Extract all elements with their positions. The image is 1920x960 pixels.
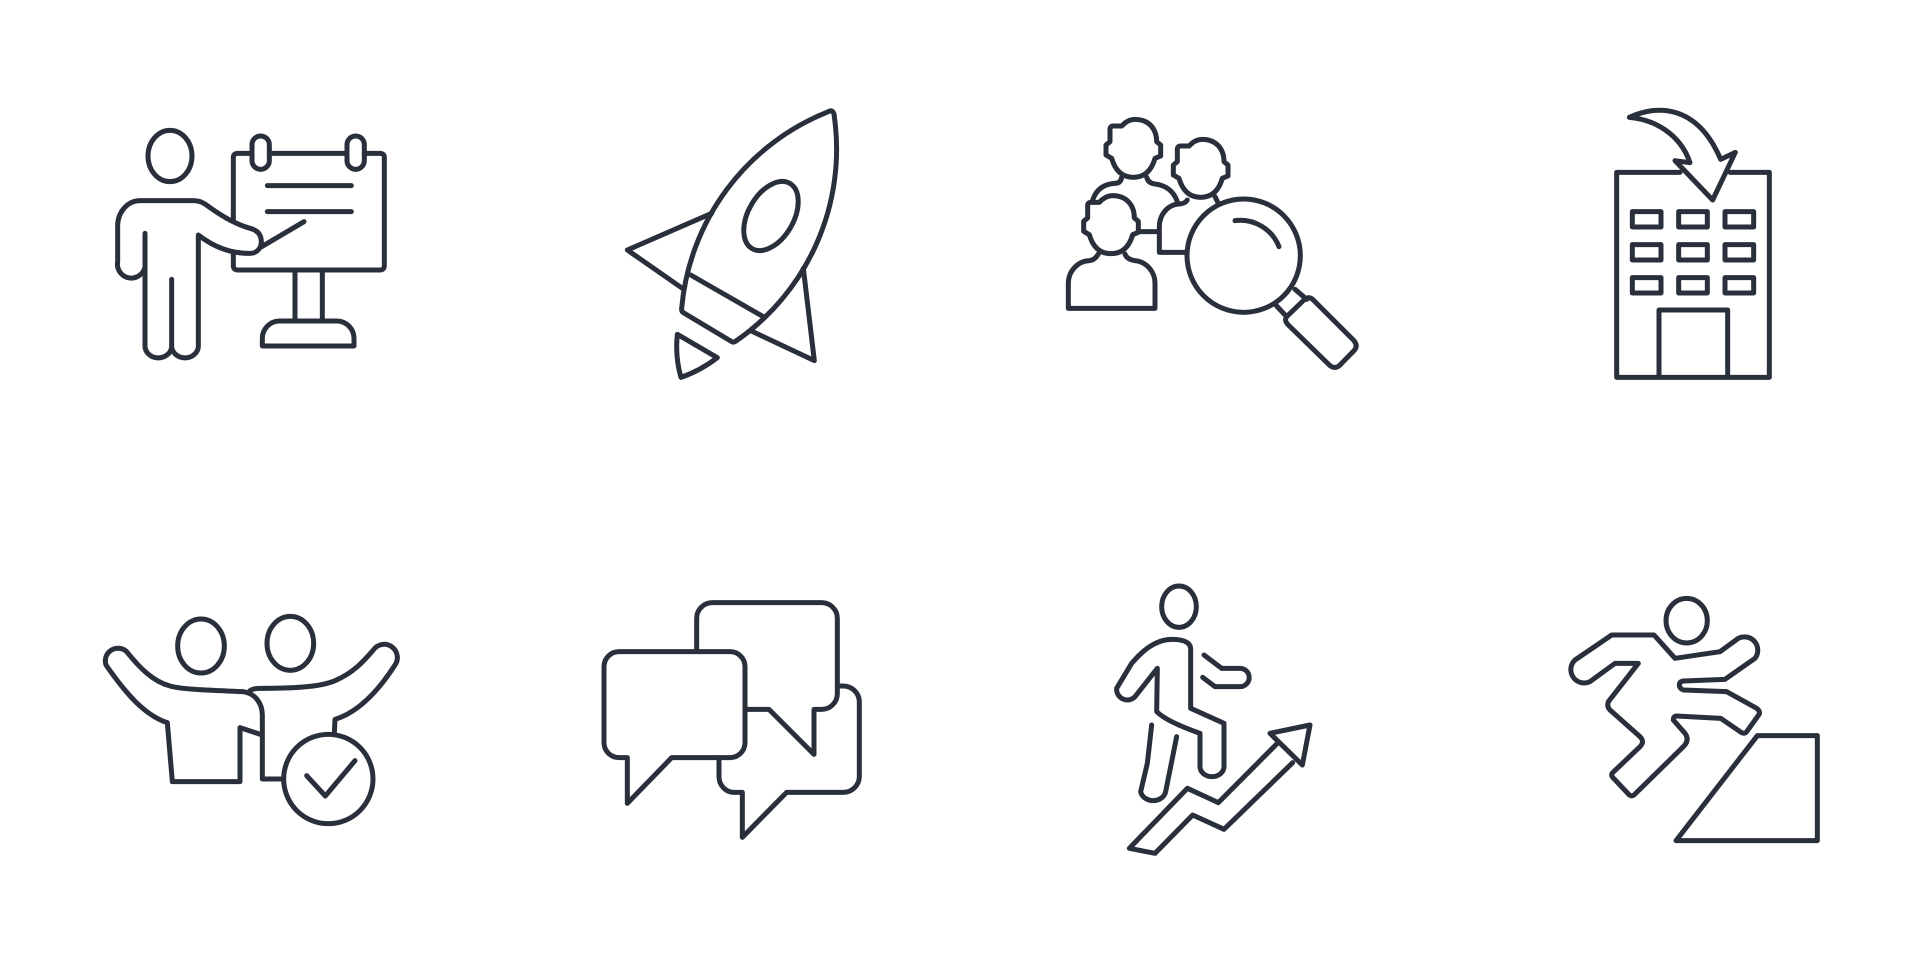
climber arm: [1203, 655, 1249, 687]
icon: speech bubbles: [604, 603, 859, 837]
rocket fins: [627, 213, 814, 361]
rising arrow: [1129, 725, 1310, 853]
jumper body: [1571, 635, 1759, 796]
board text lines: [267, 186, 351, 212]
arrow into building: [1629, 110, 1735, 200]
climber torso and raised leg: [1117, 639, 1224, 777]
board: [233, 153, 384, 270]
building door: [1659, 310, 1728, 377]
jumper head: [1666, 598, 1707, 643]
icon: person climbing arrow: [1117, 586, 1310, 853]
front bubble: [604, 652, 745, 803]
lower back bubble: [719, 686, 859, 837]
top back bubble: [697, 603, 837, 754]
building windows: [1632, 212, 1754, 293]
climber head: [1162, 586, 1196, 627]
board stand: [262, 272, 354, 346]
icon: building with arrow: [1617, 110, 1769, 377]
board clips: [252, 136, 364, 169]
magnifier lens: [1187, 199, 1300, 312]
rocket flame: [677, 334, 717, 377]
back person left: [1093, 119, 1177, 202]
check circle: [284, 734, 373, 824]
left head: [178, 619, 224, 673]
front person: [1068, 196, 1158, 308]
icon: rocket: [627, 111, 837, 377]
right head: [267, 616, 314, 670]
left person body: [105, 648, 283, 782]
presenter body: [117, 201, 261, 358]
rocket window: [733, 172, 809, 260]
building outline: [1617, 172, 1769, 377]
pointer: [262, 222, 304, 247]
icon: presenter at board: [117, 130, 384, 358]
lens highlight: [1235, 220, 1279, 247]
rocket band: [691, 275, 763, 317]
icon: team with check mark: [105, 616, 397, 824]
check mark: [307, 761, 355, 796]
back person right: [1159, 139, 1228, 252]
right person body: [250, 644, 397, 733]
climber lower leg: [1141, 725, 1177, 801]
presenter head: [148, 130, 192, 182]
magnifier handle: [1277, 289, 1356, 367]
block obstacle: [1676, 736, 1817, 841]
icon: people search: [1068, 119, 1356, 367]
rocket body: [682, 111, 837, 342]
icon: person jumping over block: [1571, 598, 1817, 841]
